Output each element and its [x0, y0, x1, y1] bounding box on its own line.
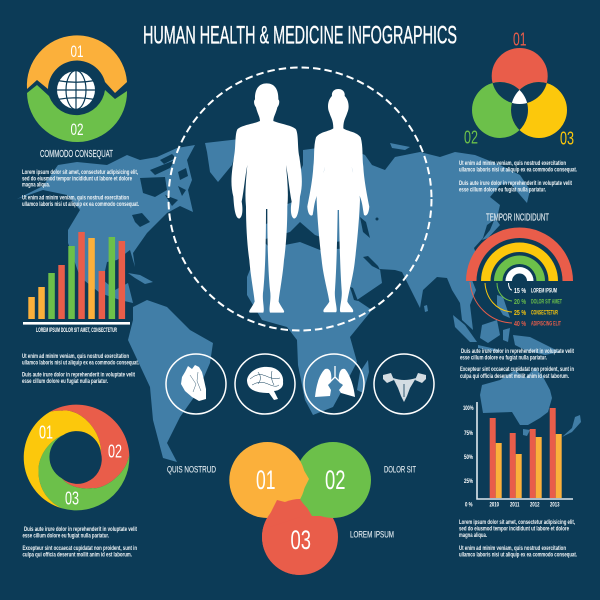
human figures: [231, 83, 369, 313]
leader lines: [470, 282, 512, 323]
green circle: [295, 442, 371, 518]
text block: top left: sed do eiusmod tempor incididunt ut labore et dolore: [22, 176, 132, 182]
bar chart: right: 25%: [464, 479, 473, 485]
green arrow: [27, 85, 127, 142]
world map: [17, 139, 581, 462]
red segment: [50, 405, 129, 489]
text block: middle left: esse cillum dolore eu fugiat nulla pariatur.: [22, 379, 108, 385]
icon: globe: [56, 70, 96, 110]
venn diagram: top right: 03: [560, 128, 574, 148]
bar chart: right: 2012: [530, 502, 540, 508]
text block: bottom left: culpa qui officia deserunt mollit anim id est laborum.: [22, 552, 132, 558]
text block: bottom left: esse cillum dolore eu fugiat nulla pariatur.: [22, 534, 109, 540]
text block: middle right: [460, 349, 574, 380]
legend: CONSECTETUR: [531, 310, 558, 316]
text block: middle left: Duis aute irure dolor in reprehenderit in voluptate velit: [22, 372, 135, 378]
text block: top right: [459, 161, 577, 194]
text block: top left: magna aliqua.: [22, 183, 50, 189]
text block: bottom right: [459, 520, 577, 558]
icon: heart: [166, 354, 226, 414]
icon: lungs: [304, 354, 364, 414]
text block: middle left: ullamco laboris nisi ut aliquip ex ea commodo consequat.: [22, 360, 139, 366]
text block: bottom left: Duis aute irure dolor in reprehenderit in voluptate velit: [24, 527, 137, 533]
legend: DOLOR SIT AMET: [531, 300, 562, 306]
bar chart: left: LOREM IPSUM DOLOR SIT AMET, CONSECTETUR: [36, 328, 117, 334]
text block: middle left: [22, 354, 139, 385]
legend: 15 %: [514, 286, 526, 295]
venn diagram: top right: [464, 30, 574, 148]
bar chart: left: [23, 232, 130, 334]
interlocking circles: 03: [290, 525, 311, 555]
bar chart: right: 0 %: [465, 502, 473, 508]
legend: 25 %: [514, 308, 526, 317]
bar chart: right: 2011: [510, 502, 520, 508]
red overlap: [262, 499, 300, 575]
label: lorem ipsum: LOREM IPSUM: [350, 530, 394, 540]
red circle: [262, 499, 338, 575]
legend: ADIPISCING ELIT: [531, 322, 561, 328]
text block: top left: Ut enim ad minim veniam, quis nostrud exercitation: [22, 196, 129, 202]
arrow cycle diagram: 01: [70, 42, 84, 61]
heading: tempor incididunt: TEMPOR INCIDIDUNT: [486, 212, 549, 224]
venn diagram: top right: 01: [513, 30, 526, 50]
green segment: [38, 435, 129, 510]
label: quis nostrud: QUIS NOSTRUD: [167, 464, 216, 476]
legend: 40 %: [514, 319, 526, 328]
icon: uterus: [374, 354, 434, 414]
map seas: [132, 154, 380, 301]
text block: top left: Lorem ipsum dolor sit amet, consectetur adipisicing elit,: [22, 170, 138, 176]
rainbow chart: [466, 228, 573, 328]
man silhouette: [231, 83, 302, 313]
orange arrow: [27, 35, 127, 93]
text block: top left: [22, 170, 139, 208]
woman silhouette: [307, 89, 369, 312]
bar chart: right: 2010: [490, 502, 499, 508]
legend: [514, 286, 562, 328]
interlocking circles: 01: [256, 465, 276, 495]
bar chart: right: 50%: [464, 455, 473, 461]
yellow segment: [24, 410, 101, 508]
label: dolor sit: DOLOR SIT: [384, 464, 416, 476]
text block: bottom left: Excepteur sint occaecat cupidatat non proident, sunt in: [22, 546, 137, 552]
bar chart: right: 75%: [464, 431, 473, 437]
bar chart: right: [463, 402, 573, 508]
orange circle: [229, 442, 309, 518]
venn diagram: top right: 02: [464, 128, 478, 148]
text block: middle right: esse cillum dolore eu fugiat nulla pariatur.: [460, 355, 547, 361]
text block: top right: esse cillum dolore eu fugiat nulla pariatur.: [459, 188, 546, 194]
interlocking circles: [229, 442, 371, 575]
legend: LOREM IPSUM: [531, 288, 557, 294]
bar chart: right: 100%: [463, 406, 474, 412]
text block: middle left: Ut enim ad minim veniam, quis nostrud exercitation: [22, 354, 129, 360]
dashed circle: [168, 68, 432, 330]
swirl ring chart: 02: [108, 442, 122, 462]
bar chart: right: 2013: [550, 502, 560, 508]
text block: top left: ullamco laboris nisi ut aliquip ex ea commodo consequat.: [22, 202, 139, 208]
swirl ring chart: 01: [39, 422, 53, 442]
interlocking circles: 02: [325, 465, 346, 495]
swirl ring chart: [24, 405, 129, 510]
heading: commodo consequat: COMMODO CONSEQUAT: [40, 148, 113, 160]
swirl ring chart: 03: [65, 488, 79, 508]
arrow cycle diagram: 02: [70, 120, 84, 139]
arrow cycle diagram: [27, 35, 127, 142]
text block: bottom left: [22, 527, 137, 558]
legend: 20 %: [514, 297, 526, 306]
text block: bottom right: magna aliqua.: [459, 533, 487, 539]
icon: brain: [235, 354, 295, 414]
